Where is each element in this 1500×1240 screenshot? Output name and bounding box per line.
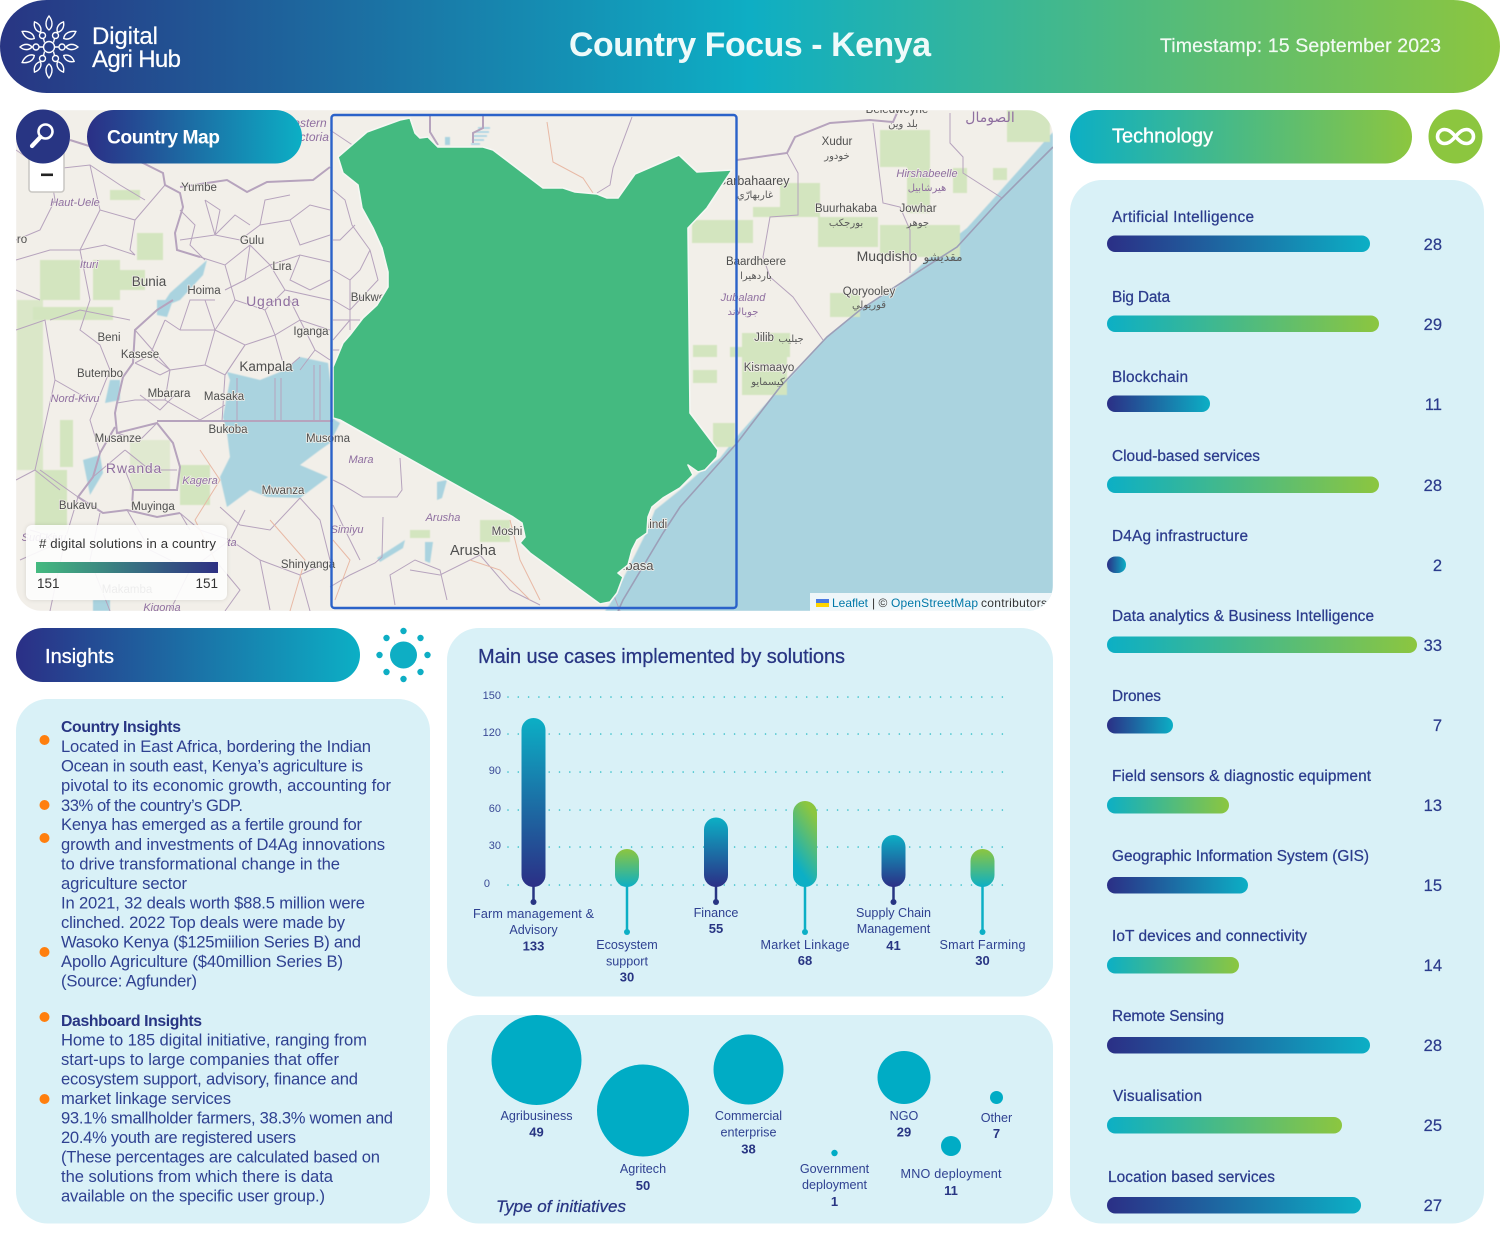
map place labels: خودور [823,151,850,162]
bubble: NGO: 29 [897,1124,911,1140]
map attribution: Leaflet [832,596,869,610]
text: country insights: Country Insights [61,719,181,736]
map place labels: Masaka [204,391,245,403]
bubble: Other: 7 [993,1126,1000,1141]
map place labels: Mwanza [262,485,305,497]
map place labels: Qoryooley [843,286,895,298]
text: dashboard insights: the solutions from which there is data [61,1167,334,1186]
bar: Smart Farming [940,849,1026,968]
bar: Ecosystem support: 30 [620,970,634,984]
text: country insights: Ocean in south east, Kenya’s agriculture is [61,756,363,776]
icon: infinity [1428,110,1482,164]
row: Cloud-based services [1107,448,1442,495]
map place labels: Shinyanga [281,559,336,571]
bar: Farm management and Advisory: Advisory [509,923,558,937]
row: D4Ag infrastructure [1107,528,1442,575]
map place labels: Musoma [306,433,351,445]
text: dashboard insights: start-ups to large companies that offer [61,1050,339,1069]
axis labels: 90 [489,765,501,777]
heading: technology [1070,110,1412,164]
text: country insights: Wasoko Kenya ($125miilion Series B) and [61,932,361,952]
row: Artificial Intelligence [1107,209,1442,254]
map place labels: Mombasa [596,558,654,573]
icon: magnifier [16,110,70,164]
map place labels: Eastern [285,116,327,130]
panel: technology [1070,180,1484,1224]
axis labels: 0 [484,878,490,890]
bubble: MNO deployment [900,1136,1002,1198]
header banner [0,0,1500,93]
map place labels: ta [227,537,237,549]
bar: Supply Chain Management: Management [857,922,931,936]
bubble: Agritech [597,1064,689,1193]
text: dashboard insights: market linkage services [61,1089,231,1108]
row: Big Data: 29 [1424,316,1442,334]
map place labels [17,104,1015,614]
bubble: Agribusiness [492,1015,582,1140]
row: Location based services: Location based services [1108,1169,1275,1186]
bar: Smart Farming: 30 [975,953,990,968]
axis labels: 150 [483,690,501,702]
bubble: Other [981,1091,1012,1141]
bubble: Government deployment: Government [800,1162,870,1176]
text: dashboard insights: 93.1% smallholder farmers, 38.3% women and [61,1108,393,1128]
map place labels: Hirshabeelle [896,168,958,180]
bubble: MNO deployment: MNO deployment [900,1167,1002,1181]
row: Geographic Information System: 15 [1424,877,1442,895]
map place labels: Kismaayo [744,362,794,374]
row: Visualisation: 25 [1424,1117,1442,1135]
axis labels: 30 [489,840,501,852]
row: IoT devices and connectivity: 14 [1424,957,1442,975]
map place labels: كيسمايو [750,377,785,388]
icon: sun [376,628,431,682]
map place labels: جوهر [906,218,929,229]
panel: type of initiatives [447,1015,1053,1224]
axis labels: 120 [483,727,501,739]
text: country insights: Apollo Agriculture ($40million Series B) [61,952,343,971]
text: country insights: to drive transformational change in the [61,854,340,874]
row: Remote Sensing [1107,1008,1442,1055]
bubble: Other: Other [981,1111,1012,1125]
bar: Ecosystem support [596,849,658,984]
title: Country Focus - Kenya [569,26,932,64]
row: Location based services: 27 [1424,1197,1442,1215]
row: Location based services [1107,1169,1442,1215]
map attribution: OpenStreetMap [891,596,978,610]
panel: country map [16,104,1053,614]
map place labels: Beledweyne [866,104,928,116]
bar: Market Linkage: 68 [798,953,812,968]
timestamp: Timestamp: 15 September 2023 [1160,35,1441,57]
bubble: Agritech: Agritech [620,1162,666,1176]
map place labels: Bukoba [208,424,248,436]
bubble: Commercial enterprise: 38 [741,1142,756,1156]
row: IoT devices and connectivity: IoT devices and connectivity [1112,928,1307,945]
bubble: NGO [878,1051,930,1140]
row: D4Ag infrastructure: 2 [1433,557,1442,575]
row: Geographic Information System [1107,848,1442,895]
row: Data analytics and Business Intelligence [1107,608,1442,655]
caption: type of initiatives: Type of initiatives [496,1197,626,1216]
bar: Farm management and Advisory: Farm management & [473,907,595,921]
heading: country map: Country Map [107,128,220,148]
row: Data analytics and Business Intelligence: Data analytics & Business Intelligence [1112,608,1374,625]
bar: Supply Chain Management: Supply Chain [856,906,931,920]
map place labels: Arusha [450,543,497,559]
map place labels: Kasese [121,349,159,361]
map place labels: Rwanda [106,460,162,476]
bar: Supply Chain Management: 41 [886,938,901,953]
bar: Market Linkage: Market Linkage [760,938,850,952]
map place labels: Kigoma [143,602,181,614]
map place labels: Yumbe [181,182,217,194]
bar: Market Linkage [760,801,850,968]
map place labels: قوريولي [852,300,886,311]
map boundaries and roads [16,113,1053,611]
map place labels: Jowhar [899,203,937,215]
text: dashboard insights: Dashboard Insights [61,1013,202,1030]
text: country insights: 33% of the country’s GDP. [61,796,243,815]
map place labels: Butembo [77,368,123,380]
bubble: Agribusiness: 49 [529,1124,544,1140]
text: country insights: pivotal to its economic growth, accounting for [61,776,391,795]
map: zoom control [29,150,64,192]
text: country insights: (Source: Agfunder) [61,972,197,990]
heading: insights [16,628,360,682]
map place labels: مقديشو [922,250,963,265]
row: Blockchain: 11 [1425,396,1442,414]
bubble: Agribusiness: Agribusiness [500,1109,573,1123]
map place labels: Kampala [239,359,293,374]
logo: Digital Agri Hub [20,16,181,78]
map place labels: Nord-Kivu [51,393,99,405]
row: Field sensors and diagnostic equipment [1107,768,1442,815]
text: dashboard insights: ecosystem support, advisory, finance and [61,1070,358,1088]
bar: Ecosystem support: support [606,954,648,968]
row: Field sensors and diagnostic equipment: 13 [1424,797,1442,815]
text: country insights: Kenya has emerged as a fertile ground for [61,815,362,834]
map attribution: contributors [981,596,1047,610]
bullets [40,735,50,1104]
map place labels: Iganga [293,326,329,338]
row: Artificial Intelligence: 28 [1424,236,1442,254]
map place labels: Muqdisho [857,248,918,264]
map place labels: بورجكب [829,218,863,229]
map place labels: بلد وين [888,119,918,130]
text: country insights: Located in East Africa, bordering the Indian [61,737,371,756]
row: IoT devices and connectivity [1107,928,1442,975]
row: Remote Sensing: Remote Sensing [1112,1008,1224,1025]
bar: Smart Farming: Smart Farming [940,938,1026,952]
map place labels: Simiyu [330,524,364,536]
text: country insights: growth and investments of D4Ag innovations [61,835,385,854]
map place labels: Kagera [182,475,218,487]
bubble: Commercial enterprise: Commercial [715,1109,782,1123]
bubble: Government deployment: deployment [802,1178,868,1192]
map legend: # digital solutions in a country [39,536,216,551]
bar: Farm management and Advisory [473,718,595,954]
bubble: Commercial enterprise [714,1034,784,1156]
row: Field sensors and diagnostic equipment: Field sensors & diagnostic equipment [1112,768,1372,785]
map place labels: Garbahaarey [717,174,790,188]
bubble: MNO deployment: 11 [944,1183,958,1198]
map place labels: Muyinga [131,501,175,513]
map place labels: Lira [272,261,292,273]
axis labels: 60 [489,803,501,815]
map place labels: Gulu [240,235,264,247]
row: Data analytics and Business Intelligence: 33 [1424,637,1442,655]
text: dashboard insights: 20.4% youth are registered users [61,1128,296,1147]
map: country bounding box [332,115,736,608]
map place labels: هيرشابيل [908,183,946,194]
row: Remote Sensing: 28 [1424,1037,1442,1055]
row: Blockchain: Blockchain [1112,369,1188,386]
map place labels: باردهيرا [740,271,772,282]
map place labels: الصومال [965,110,1015,126]
map place labels: Jubaland [720,292,766,304]
bar: Finance: 55 [709,921,723,936]
map place labels: Beni [97,332,121,344]
row: Drones [1107,688,1442,735]
map place labels: Victoria [289,130,329,144]
map place labels: Musanze [95,433,141,445]
row: Big Data [1107,289,1442,334]
heading: insights: Insights [45,646,114,668]
map base: land, sea and vegetation [16,110,1053,611]
heading: main use cases: Main use cases implemented by solutions [478,646,845,668]
row: Artificial Intelligence: Artificial Intelligence [1112,209,1254,226]
logo: Digital Agri Hub: Agri Hub [92,46,181,73]
panel: insights [16,699,430,1224]
map place labels: Uganda [246,293,300,309]
text: dashboard insights [61,1013,393,1206]
map attribution: | © [872,596,887,610]
text: country insights [61,719,391,990]
row: Cloud-based services: 28 [1424,477,1442,495]
text: dashboard insights: Home to 185 digital initiative, ranging from [61,1030,367,1050]
map place labels: Moshi [492,526,522,538]
bar: Farm management and Advisory: 133 [523,938,544,954]
map place labels: Bunia [132,274,167,289]
map place labels: Malindi [631,519,667,531]
map place labels: Xudur [822,136,853,148]
map legend: 151 [195,576,218,591]
map place labels: Baardheere [726,256,786,268]
map place labels: Sud-Kivu [22,532,66,544]
bar: Supply Chain Management [856,835,931,953]
map place labels: Arusha [425,512,460,524]
map place labels: Haut-Uele [50,197,100,209]
row: Drones: 7 [1433,717,1442,735]
row: Big Data: Big Data [1112,289,1170,306]
text: country insights: clinched. 2022 Top deals were made by [61,913,346,932]
text: country insights: In 2021, 32 deals worth $88.5 million were [61,894,365,912]
map place labels: Mbarara [148,388,191,400]
row: Cloud-based services: Cloud-based services [1112,448,1260,465]
row: D4Ag infrastructure: D4Ag infrastructure [1112,528,1248,545]
map place labels: Bukwo [351,292,385,304]
bubble: Commercial enterprise: enterprise [720,1126,777,1140]
map place labels: غاربهارّي [737,190,773,201]
map attribution [810,593,1053,611]
map place labels: Mara [348,454,374,466]
map place labels: جيليب [778,334,804,345]
map place labels: Hoima [187,285,221,297]
bubble: Agritech: 50 [636,1178,650,1193]
axis labels [483,690,501,890]
bar: Finance: Finance [694,906,738,920]
map place labels: Makamba [102,584,153,596]
bar: Ecosystem support: Ecosystem [596,938,658,952]
map place labels: ro [17,234,27,246]
map place labels: Buurhakaba [815,203,878,215]
panel: main use cases [447,628,1053,996]
text: dashboard insights: available on the specific user group.) [61,1186,325,1206]
heading: technology: Technology [1112,126,1213,148]
map: Kenya shape [333,118,732,604]
text: country insights: agriculture sector [61,874,187,893]
map place labels: Bukavu [59,500,97,512]
bar: Finance [694,818,738,936]
bubble: NGO: NGO [890,1109,919,1123]
row: Visualisation [1107,1088,1442,1135]
bubble: Government deployment: 1 [831,1194,838,1209]
map place labels: Ituri [80,259,99,271]
row: Geographic Information System: Geographic Information System (GIS) [1112,848,1369,865]
map place labels: جوبالاند [728,307,758,318]
heading: country map [87,110,302,164]
bubble: Government deployment [800,1150,870,1209]
text: dashboard insights: (These percentages are calculated based on [61,1148,380,1166]
map legend: 151 [37,576,60,591]
map place labels: Jilib [754,332,774,344]
logo: Digital Agri Hub: Digital [92,23,158,50]
row: Visualisation: Visualisation [1113,1088,1202,1105]
row: Blockchain [1107,369,1442,414]
map legend [26,525,227,600]
row: Drones: Drones [1112,688,1161,705]
